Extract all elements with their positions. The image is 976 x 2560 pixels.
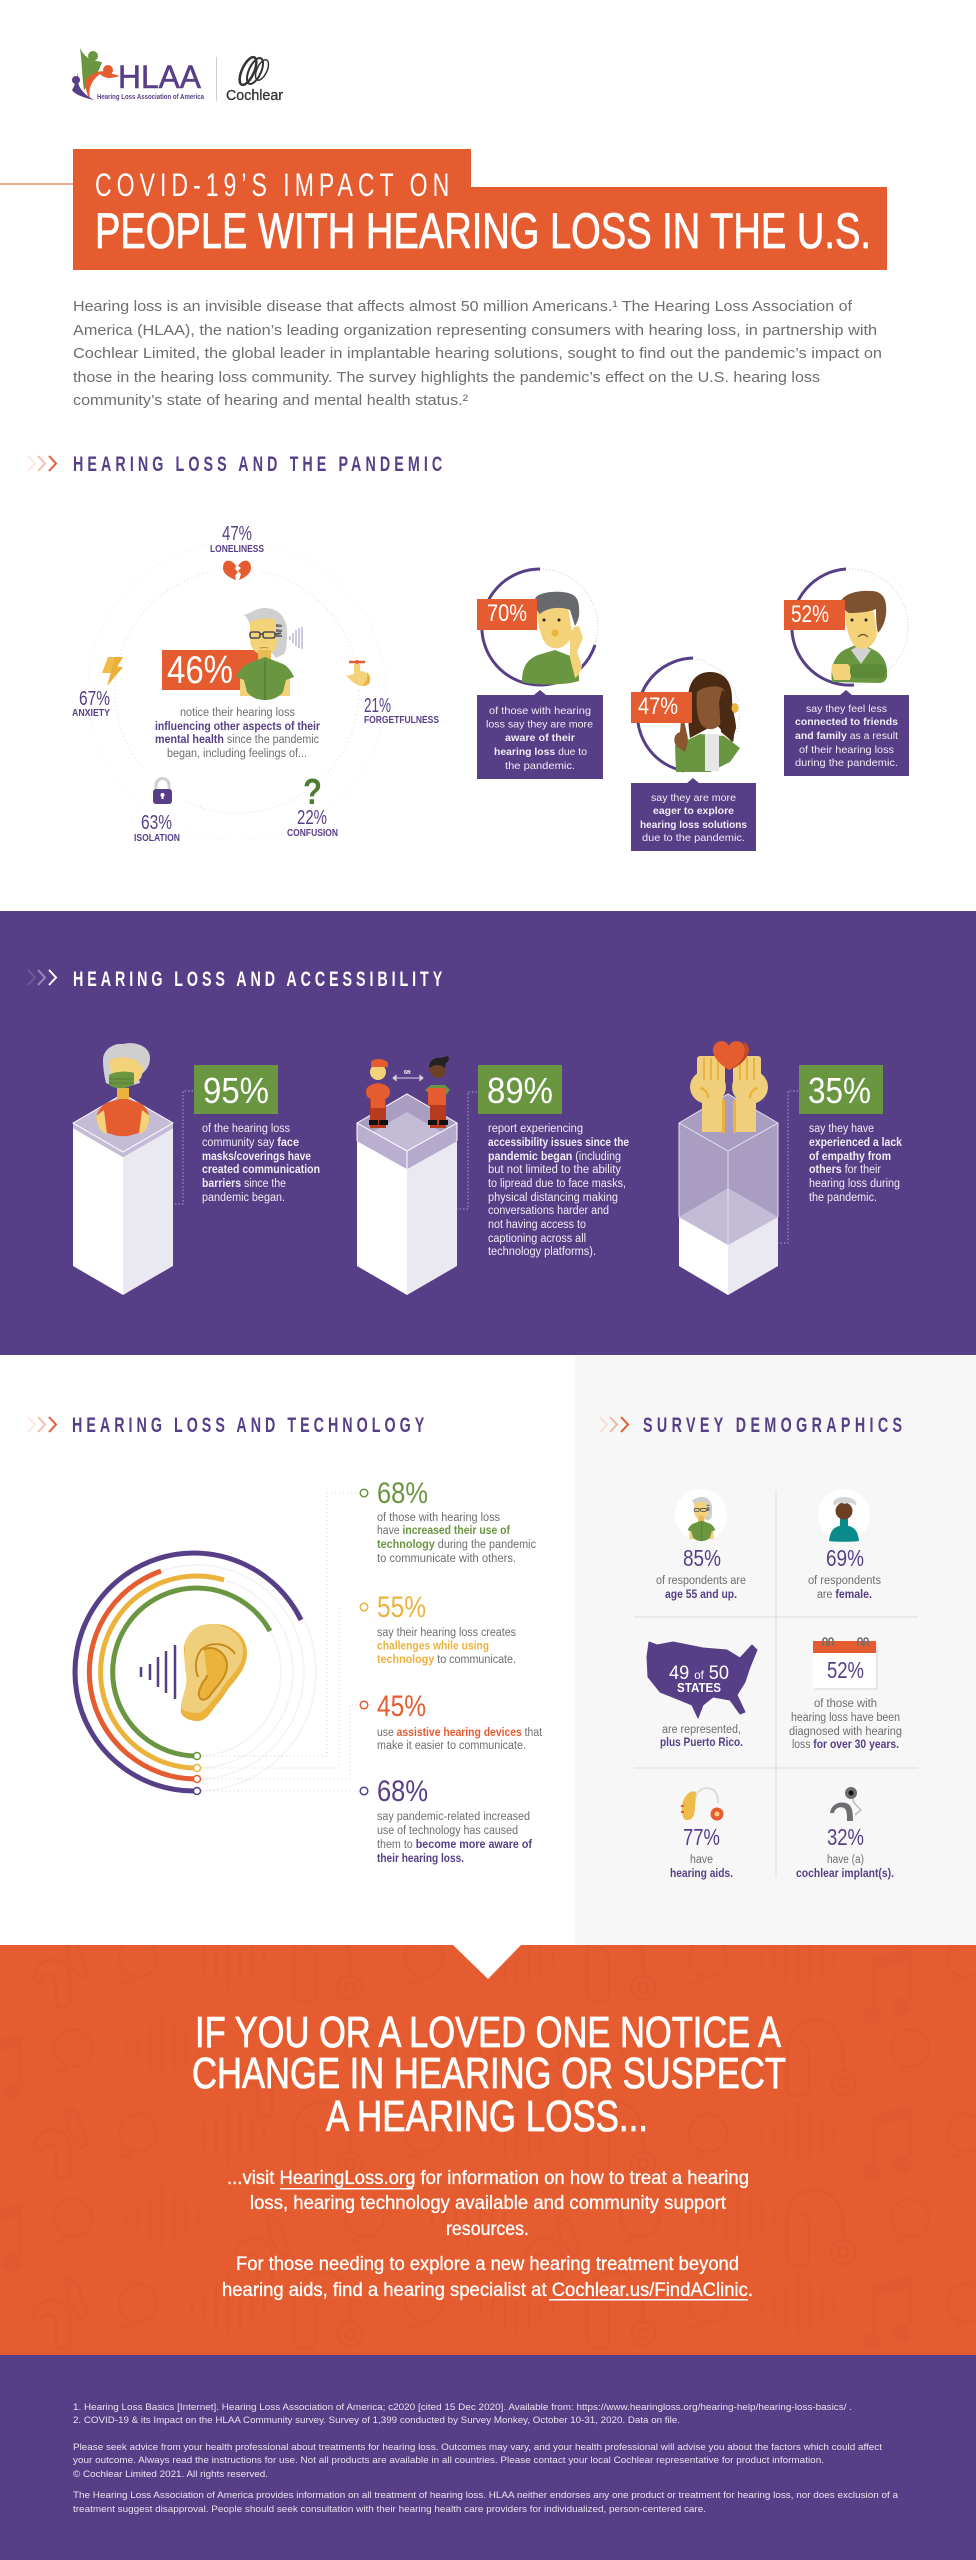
stat: isolation: ISOLATION (134, 832, 180, 844)
text: 89%: accessibility issues since the (488, 1137, 629, 1149)
chart: concentric rings (75, 1493, 359, 1794)
stat: 69% female: 69% (826, 1545, 864, 1571)
icon: two people distancing (366, 1056, 450, 1128)
text: mental health: influencing other aspects of their (155, 721, 320, 733)
references (73, 2402, 852, 2425)
text: 89%: not having access to (488, 1219, 586, 1231)
stat: 77% hearing aids: 77% (683, 1824, 720, 1850)
stat: 68% more aware: 68% (377, 1775, 428, 1808)
pillar 3: 35% (679, 1041, 903, 1295)
stat: 68% technology use: to communicate with others. (377, 1553, 516, 1565)
stat: 49 of 50 states: 49 of 50 (669, 1663, 729, 1684)
icon: US map (647, 1642, 757, 1718)
text: 95% (202, 1123, 320, 1204)
stat: 47% eager: 47% (638, 693, 678, 720)
text: 35%: hearing loss during (809, 1178, 900, 1190)
text: 95%: community say face (202, 1137, 299, 1149)
disclaimer: cochlear (73, 2442, 882, 2479)
text: 35%: others for their (809, 1164, 881, 1176)
references: 2. COVID-19 & its Impact on the HLAA Community survey. Survey of 1,399 conducted by Survey Monkey, October 10-31, 2020. Data on file. (73, 2415, 680, 2425)
text panel: during the pandemic. (795, 757, 898, 769)
icon: two people distancing: 6ft (404, 1070, 411, 1076)
stat: confusion: 22% (297, 807, 327, 829)
stat: 55% challenges: technology to communicate. (377, 1654, 516, 1666)
text: 95%: barriers since the (202, 1178, 286, 1190)
stat: 32% cochlear implants: cochlear implant(s). (796, 1868, 894, 1880)
heading: call to action: IF YOU OR A LOVED ONE NOTICE A (195, 2008, 782, 2057)
intro paragraph: Hearing loss is an invisible disease that affects almost 50 million Americans.¹ The Hearing Loss Association of (73, 298, 853, 315)
pillar 2: 89% (357, 1056, 629, 1295)
text panel: hearing loss due to (494, 746, 587, 758)
text: 35%: of empathy from (809, 1151, 891, 1163)
heading: hearing loss and the pandemic: HEARING LOSS AND THE PANDEMIC (73, 452, 442, 476)
title: COVID-19’S IMPACT ON (95, 167, 449, 203)
text: mental health: mental health since the pandemic (155, 734, 319, 746)
text: find a clinic: hearing aids, find a hearing specialist at Cochlear.us/FindAClinic. (222, 2280, 753, 2301)
stat: 52% diagnosed: of those with (814, 1698, 877, 1710)
text panel: the pandemic. (505, 760, 575, 772)
text: 95%: created communication (202, 1164, 320, 1176)
heading: hearing loss and technology: HEARING LOSS AND TECHNOLOGY (72, 1413, 424, 1437)
text panel: of those with hearing (489, 705, 591, 717)
stat: 77% hearing aids: have (690, 1854, 713, 1866)
stat: 70%: 70% (487, 600, 527, 627)
icon: woman with mask (96, 1043, 150, 1136)
heading: hearing loss and accessibility: HEARING LOSS AND ACCESSIBILITY (73, 967, 442, 991)
stat: 55% challenges: say their hearing loss creates (377, 1627, 516, 1639)
stat: anxiety: 67% (79, 688, 110, 710)
text: 89%: to lipread due to face masks, (488, 1178, 626, 1190)
text panel: connected to friends (795, 716, 898, 728)
stat: 45% assistive devices: make it easier to communicate. (377, 1740, 526, 1752)
heading: call to action: CHANGE IN HEARING OR SUSPECT (192, 2049, 786, 2098)
icon: cochlear implant (830, 1787, 861, 1821)
stat: 85% age: of respondents are (656, 1575, 746, 1587)
stat: 47% eager (631, 658, 756, 851)
disclaimer: cochlear: © Cochlear Limited 2021. All rights reserved. (73, 2469, 268, 2479)
text: find a clinic (222, 2254, 753, 2301)
disclaimer: cochlear: Please seek advice from your health professional about treatments for hearing loss. Outcomes may vary, and your health professional will advise you about the factors which could affect (73, 2442, 882, 2452)
intro paragraph: Cochlear Limited, the global leader in implantable hearing solutions, sought to find out the pandemic’s impact on (73, 345, 882, 362)
stat: 68% more aware: use of technology has caused (377, 1825, 518, 1837)
heading: call to action: A HEARING LOSS... (326, 2092, 648, 2141)
callout: 46%: 46% (167, 649, 233, 692)
heading: survey demographics: SURVEY DEMOGRAPHICS (643, 1413, 902, 1437)
text: 95%: masks/coverings have (202, 1151, 311, 1163)
stat: 85% age: 85% (683, 1545, 721, 1571)
stat: 49 of 50 states: plus Puerto Rico. (660, 1737, 743, 1749)
panel: accessibility (0, 911, 976, 1355)
stat: forgetfulness: 21% (364, 695, 391, 717)
accent line (0, 183, 73, 185)
stat: 68% technology use: of those with hearing loss (377, 1512, 500, 1524)
stat: 32% cochlear implants: have (a) (827, 1854, 864, 1866)
text: 89%: pandemic began (including (488, 1151, 621, 1163)
intro paragraph: those in the hearing loss community. The survey highlights the pandemic’s effect on the U.S. hearing loss (73, 369, 820, 386)
stat: confusion (287, 771, 338, 839)
stat: 77% hearing aids: hearing aids. (670, 1868, 733, 1880)
pillar 1: 95% (73, 1043, 320, 1295)
stat: 55% challenges (360, 1591, 516, 1666)
stat: 68% technology use (360, 1477, 536, 1565)
text: 35%: the pandemic. (809, 1192, 877, 1204)
stat: isolation (134, 778, 180, 844)
callout: 46% (162, 608, 302, 700)
stat: 45% assistive devices: use assistive hearing devices that (377, 1727, 543, 1739)
stat: 68% more aware: them to become more aware of (377, 1839, 532, 1851)
text panel: say they are more (651, 792, 736, 804)
text panel: and family as a result (795, 730, 898, 742)
stat: 52% diagnosed: hearing loss have been (791, 1712, 900, 1724)
stat: 49 of 50 states: are represented, (662, 1724, 741, 1736)
logos: HLAA and Cochlear: Cochlear (226, 87, 283, 104)
stat: 68% technology use: technology during the pandemic (377, 1539, 536, 1551)
stat: 85% age: age 55 and up. (665, 1589, 737, 1601)
stat: 49 of 50 states (647, 1642, 757, 1749)
title (73, 149, 887, 270)
text: visit hearingloss.org (227, 2168, 749, 2240)
panel: mental health circle (72, 523, 439, 844)
stat: 55% challenges: 55% (377, 1591, 426, 1624)
text panel (631, 778, 756, 851)
stat: 69% female (808, 1489, 881, 1601)
stat: 52% (784, 569, 909, 776)
stat: 68% more aware (360, 1775, 532, 1865)
logos: HLAA and Cochlear (72, 48, 283, 104)
text panel: eager to explore (653, 805, 734, 817)
stat: 49 of 50 states: STATES (677, 1680, 721, 1695)
text: 95%: of the hearing loss (202, 1123, 290, 1135)
text: 35%: experienced a lack (809, 1137, 903, 1149)
text panel: loss say they are more (486, 718, 593, 730)
stat: 77% hearing aids (670, 1788, 733, 1880)
text: mental health (155, 707, 320, 760)
icon: Cochlear swirl (236, 55, 271, 87)
text: visit hearingloss.org: resources. (446, 2219, 529, 2240)
pillar 1: 95%: 95% (203, 1070, 269, 1111)
text panel (477, 690, 603, 779)
stat: confusion: CONFUSION (287, 827, 338, 839)
references: 1. Hearing Loss Basics [Internet]. Hearing Loss Association of America; c2020 [cited 15 Dec 2020]. Available from: https://www.hearingloss.org/hearing-help/hearing-loss-basics/ . (73, 2402, 852, 2412)
panel: call to action (0, 1925, 976, 2355)
stat: 68% technology use: 68% (377, 1477, 428, 1510)
text: 89%: conversations harder and (488, 1205, 609, 1217)
logos: HLAA and Cochlear: HLAA (118, 59, 202, 95)
text: 89%: technology platforms). (488, 1246, 596, 1258)
text: 89%: but not limited to the ability (488, 1164, 621, 1176)
stat: 45% assistive devices (360, 1690, 543, 1752)
icon: hearing aid (681, 1788, 724, 1820)
text panel: hearing loss solutions (640, 819, 747, 831)
intro paragraph (73, 298, 882, 409)
stat: loneliness: LONELINESS (210, 543, 264, 555)
panel: technology (28, 1413, 543, 1865)
text panel: aware of their (505, 732, 575, 744)
icon: ear and sound (141, 1624, 247, 1721)
stat: anxiety: ANXIETY (72, 707, 110, 719)
stat: loneliness: 47% (222, 523, 252, 545)
text: mental health: began, including feelings of... (167, 748, 307, 760)
heading: call to action (192, 2008, 786, 2141)
stat: 68% technology use: have increased their use of (377, 1525, 510, 1537)
stat: 69% female: of respondents (808, 1575, 881, 1587)
icon: woman with hearing aid (674, 672, 740, 772)
stat: isolation: 63% (141, 812, 172, 834)
text: visit hearingloss.org: ...visit HearingLoss.org for information on how to treat a hearing (227, 2168, 749, 2189)
text: find a clinic: For those needing to explore a new hearing treatment beyond (236, 2254, 739, 2275)
text: 89%: physical distancing making (488, 1192, 618, 1204)
text: 89%: captioning across all (488, 1233, 586, 1245)
stat: loneliness (210, 523, 264, 580)
text: 89% (488, 1123, 629, 1258)
panel: footer (0, 2355, 976, 2560)
stat: 85% age (656, 1489, 746, 1601)
pillar 2: 89%: 89% (487, 1070, 553, 1111)
stat: 45% assistive devices: 45% (377, 1690, 426, 1723)
text panel: due to the pandemic. (642, 832, 745, 844)
stat: 52% diagnosed (789, 1638, 902, 1751)
logos: HLAA and Cochlear: Hearing Loss Association of America (97, 94, 204, 101)
stat: 55% challenges: challenges while using (377, 1640, 489, 1652)
stat: forgetfulness: FORGETFULNESS (364, 714, 439, 726)
pillar 3: 35%: 35% (808, 1070, 871, 1111)
disclaimer: HLAA: treatment suggest disapproval. People should seek consultation with their hearing health care providers for individualized, person-centered care. (73, 2504, 706, 2514)
icon: sad person with crossed arms (832, 591, 887, 683)
stat: anxiety (72, 657, 123, 719)
icon: older woman (829, 1497, 859, 1542)
icon: man on phone (522, 592, 583, 685)
icon: hands holding heart (690, 1041, 768, 1133)
disclaimer: HLAA: The Hearing Loss Association of America provides information on all treatment of hearing loss. HLAA neither endorses any one product or treatment for hearing loss, nor does exclusion of a (73, 2490, 899, 2500)
stat: 32% cochlear implants: 32% (827, 1824, 864, 1850)
stat: 52% diagnosed: diagnosed with hearing (789, 1726, 902, 1738)
intro paragraph: America (HLAA), the nation’s leading organization representing consumers with hearing loss, in partnership with (73, 322, 877, 339)
stat: 70% (477, 569, 603, 779)
stat: 32% cochlear implants (796, 1787, 894, 1880)
text panel (784, 690, 909, 776)
text: 35% (809, 1123, 903, 1204)
icon: calendar: 52% (827, 1657, 864, 1683)
stat: 52% diagnosed: loss for over 30 years. (792, 1739, 899, 1751)
icon: HLAA figures (72, 48, 120, 100)
stat: 68% more aware: say pandemic-related increased (377, 1811, 530, 1823)
text panel: say they feel less (806, 703, 887, 715)
icon: man with hearing loss (236, 608, 302, 700)
text: 95%: pandemic began. (202, 1192, 285, 1204)
text: 35%: say they have (809, 1123, 874, 1135)
text: mental health: notice their hearing loss (180, 707, 295, 719)
intro paragraph: community’s state of hearing and mental health status.² (73, 392, 468, 409)
stat: confusion: ? (303, 771, 322, 812)
disclaimer: HLAA (73, 2490, 899, 2514)
icon: older man (688, 1497, 715, 1541)
text panel: of their hearing loss (799, 744, 894, 756)
disclaimer: cochlear: your outcome. Always read the instructions for use. Not all products are available in all countries. Please contact your local Cochlear representative for product information. (73, 2455, 824, 2465)
stat: 52%: 52% (791, 601, 829, 628)
stat: 69% female: are female. (817, 1589, 872, 1601)
text: visit hearingloss.org: loss, hearing technology available and community support (250, 2193, 727, 2214)
stat: forgetfulness (346, 660, 439, 726)
stat: 68% more aware: their hearing loss. (377, 1853, 464, 1865)
panel: survey demographics (575, 1355, 976, 1945)
text: 89%: report experiencing (488, 1123, 583, 1135)
